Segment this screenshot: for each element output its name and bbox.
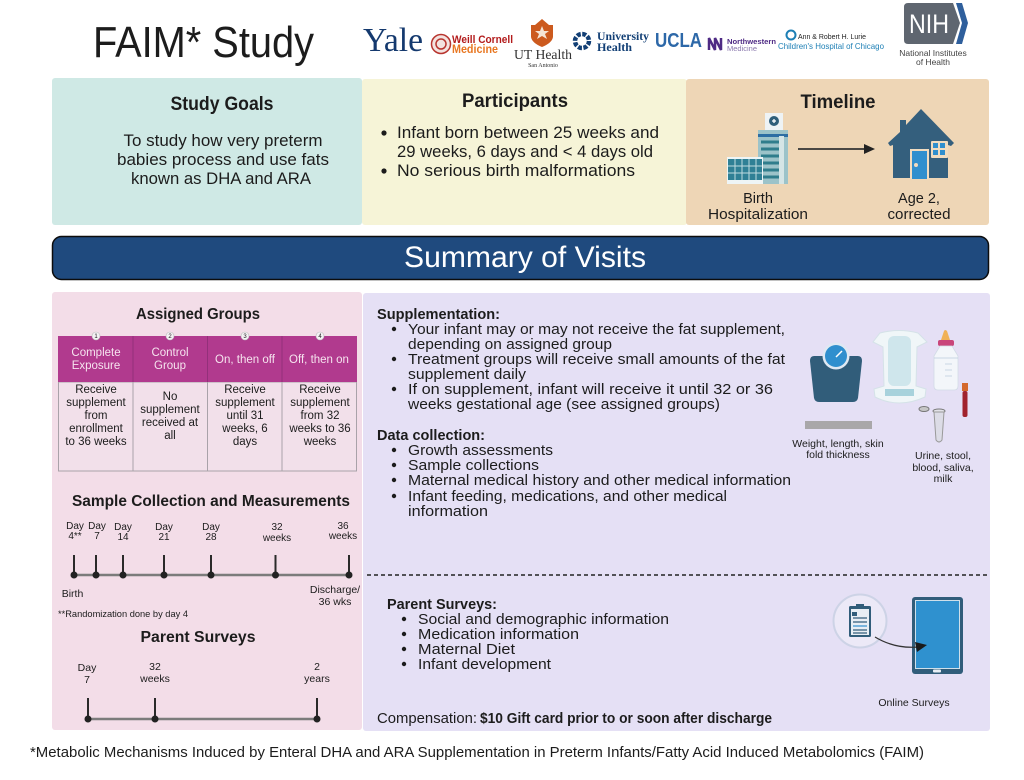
timeline: parent surveys: weeks	[139, 673, 170, 685]
label: weight length skin fold	[792, 438, 884, 461]
compensation: Compensation:	[377, 711, 477, 727]
column text: control group: No	[163, 391, 177, 403]
icon: clipboard	[834, 594, 886, 648]
icon: tablet	[912, 597, 963, 674]
supplementation text: If on supplement, infant will receive it until 32 or 36	[408, 381, 773, 398]
column headers: Off, then on	[289, 354, 349, 366]
column text: on then off: until 31	[226, 410, 264, 422]
timeline: sample collection: 36	[337, 521, 349, 532]
heading: sample collection and measurements: Sample Collection and Measurements	[72, 493, 350, 510]
table: assigned groups: 3	[243, 334, 247, 340]
table: assigned groups: 2	[168, 334, 172, 340]
icon: blood tube	[962, 383, 968, 417]
participants criteria	[381, 123, 659, 180]
logo: UCLA: UCLA	[655, 30, 702, 52]
data collection text	[377, 427, 791, 520]
column text: off then on: weeks	[303, 436, 337, 448]
label: urine stool blood saliva milk	[912, 450, 974, 485]
parent surveys text: Maternal Diet	[418, 641, 516, 658]
column headers: Control	[151, 347, 189, 359]
logo: University Health	[575, 31, 649, 54]
column text: on then off: supplement	[215, 397, 276, 409]
icon: sample vial	[919, 406, 945, 442]
timeline: sample collection: Birth	[62, 588, 83, 600]
logo: Northwestern Medicine: Northwestern	[727, 37, 776, 46]
timeline: sample collection: 14	[117, 532, 129, 543]
timeline: sample collection: 28	[205, 532, 217, 543]
panel: visit details	[363, 293, 990, 731]
column text: complete exposure: supplement	[66, 397, 127, 409]
label: urine stool blood saliva milk: Urine, stool,	[915, 450, 971, 462]
column headers	[71, 347, 349, 372]
column text: control group	[140, 391, 201, 442]
logo: NIH: National Institutes	[899, 48, 967, 58]
timeline: sample collection: weeks	[328, 531, 357, 542]
column text: on then off: days	[233, 436, 257, 448]
logo: UT Health San Antonio: UT Health	[514, 48, 572, 63]
column text: complete exposure: from	[84, 410, 108, 422]
column text: off then on	[288, 384, 351, 448]
timeline: parent surveys: years	[304, 673, 330, 685]
banner: summary of visits	[52, 236, 988, 280]
table: assigned groups: 1	[94, 334, 98, 340]
parent surveys text: Social and demographic information	[418, 611, 669, 628]
panel: timeline	[686, 79, 989, 225]
column text: complete exposure	[65, 384, 127, 448]
study goals text: To study how very preterm	[124, 131, 322, 150]
logo: Weill Cornell Medicine: Medicine	[452, 44, 498, 56]
parent surveys text: Medication information	[418, 626, 579, 643]
timeline: sample collection: 4**	[68, 531, 82, 542]
column text: off then on: supplement	[290, 397, 351, 409]
label: weight length skin fold: fold thickness	[806, 449, 870, 461]
data collection text: Maternal medical history and other medical information	[408, 472, 791, 489]
timeline: parent surveys: 32	[149, 661, 161, 673]
logo: Northwestern Medicine: Medicine	[727, 46, 757, 53]
panel: participants	[362, 79, 687, 225]
data collection text: Infant feeding, medications, and other medical	[408, 488, 727, 505]
supplementation text: supplement daily	[408, 366, 527, 383]
partner logos	[363, 3, 968, 69]
label: urine stool blood saliva milk: blood, saliva,	[912, 462, 974, 474]
timeline: sample collection: Discharge/	[310, 584, 360, 596]
label: age 2 corrected: corrected	[888, 207, 950, 223]
icon: diaper	[873, 330, 927, 403]
participants criteria: No serious birth malformations	[397, 161, 635, 180]
label: online surveys: Online Surveys	[878, 697, 950, 709]
icon: hospital	[727, 113, 788, 184]
panel: groups and schedule	[52, 292, 362, 730]
logo: UT Health San Antonio	[514, 19, 572, 69]
label: age 2 corrected	[888, 191, 950, 223]
heading: timeline: Timeline	[800, 92, 876, 113]
timeline: sample collection: Day	[155, 522, 173, 533]
compensation: $10 Gift card prior to or soon after discharge	[480, 711, 772, 727]
study goals text: babies process and use fats	[117, 150, 329, 169]
label: birth hospitalization: Birth	[743, 191, 773, 207]
logo: University Health: Health	[597, 42, 633, 54]
column headers: On, then off	[215, 354, 276, 366]
data collection text: Growth assessments	[408, 442, 553, 459]
study goals text	[117, 131, 329, 188]
label: birth hospitalization: Hospitalization	[708, 207, 808, 223]
column text: on then off: Receive	[224, 384, 266, 396]
logo: NIH	[899, 3, 968, 67]
timeline: parent surveys: 2	[314, 661, 320, 673]
logo: NIH: of Health	[916, 57, 950, 67]
title: FAIM* Study	[93, 18, 314, 67]
heading: parent surveys: Parent Surveys	[140, 629, 256, 646]
label: birth hospitalization	[708, 191, 808, 223]
parent surveys text	[387, 596, 669, 673]
column text: on then off: weeks, 6	[221, 423, 268, 435]
participants criteria: Infant born between 25 weeks and	[397, 123, 659, 142]
label: weight length skin fold: Weight, length, skin	[792, 438, 884, 450]
logo: Lurie Children's: Children's Hospital of Chicago	[778, 41, 884, 51]
column text: off then on: from 32	[300, 410, 340, 422]
arrow: birth to age 2	[798, 144, 875, 154]
column headers: Group	[154, 360, 186, 372]
column text: control group: received at	[142, 417, 199, 429]
logo: Weill Cornell Medicine: Weill Cornell	[452, 34, 513, 46]
logo: NIH: NIH	[909, 9, 949, 39]
supplementation text: depending on assigned group	[408, 336, 612, 353]
column text: control group: all	[164, 430, 176, 442]
supplementation text: Supplementation:	[377, 306, 500, 323]
logo: UT Health San Antonio: San Antonio	[528, 63, 558, 69]
arrow: clipboard to tablet	[875, 637, 927, 652]
timeline: sample collection: 32	[271, 522, 283, 533]
logo: Lurie Children's	[778, 30, 884, 51]
column headers: Exposure	[72, 360, 120, 372]
logo: University Health: University	[597, 31, 649, 43]
column headers: Complete	[71, 347, 121, 359]
timeline: sample collection: weeks	[262, 533, 291, 544]
heading: participants: Participants	[462, 91, 568, 112]
icon: home	[888, 109, 954, 179]
icon: ruler	[805, 421, 872, 429]
logo: Yale: Yale	[363, 22, 423, 59]
study goals text: known as DHA and ARA	[131, 169, 312, 188]
timeline: sample collection: 7	[94, 531, 100, 542]
data collection text: Sample collections	[408, 457, 539, 474]
panel: study goals	[52, 78, 362, 225]
supplementation text: weeks gestational age (see assigned groups)	[407, 396, 720, 413]
supplementation text: Treatment groups will receive small amounts of the fat	[408, 351, 786, 368]
timeline: sample collection: Day	[114, 522, 132, 533]
column text: off then on: Receive	[299, 384, 341, 396]
footnote: *Metabolic Mechanisms Induced by Enteral DHA and ARA Supplementation in Preterm Infants/Fatty Acid Induced Metabolomics (FAIM)	[30, 744, 924, 761]
logo: Weill Cornell Medicine	[432, 34, 513, 56]
column text: control group: supplement	[140, 404, 201, 416]
data collection text: information	[408, 503, 488, 520]
column text: complete exposure: to 36 weeks	[65, 436, 127, 448]
column text: complete exposure: enrollment	[69, 423, 124, 435]
supplementation text	[377, 306, 786, 413]
logo: Lurie Children's: Ann & Robert H. Lurie	[798, 32, 866, 41]
banner: summary of visits: Summary of Visits	[404, 241, 646, 274]
supplementation text: Your infant may or may not receive the fat supplement,	[408, 321, 785, 338]
label: urine stool blood saliva milk: milk	[934, 473, 953, 485]
timeline: parent surveys	[78, 661, 330, 722]
icon: scale	[810, 342, 862, 402]
participants criteria: 29 weeks, 6 days and < 4 days old	[397, 142, 653, 161]
timeline: parent surveys: Day	[78, 662, 97, 674]
heading: study goals: Study Goals	[170, 94, 274, 115]
timeline: sample collection: Day	[202, 522, 220, 533]
heading: assigned groups: Assigned Groups	[136, 306, 260, 323]
column text: off then on: weeks to 36	[288, 423, 351, 435]
timeline: sample collection: Day	[88, 521, 106, 532]
timeline: sample collection	[62, 521, 360, 608]
parent surveys text: Infant development	[418, 656, 552, 673]
label: age 2 corrected: Age 2,	[898, 191, 940, 207]
icon: bottle	[934, 330, 958, 390]
table: assigned groups	[58, 332, 357, 471]
timeline: parent surveys: 7	[84, 674, 90, 686]
data collection text: Data collection:	[377, 427, 485, 444]
timeline: sample collection: 36 wks	[319, 596, 351, 608]
logo: Northwestern Medicine	[709, 37, 776, 53]
column text: complete exposure: Receive	[75, 384, 117, 396]
timeline: sample collection: 21	[158, 532, 170, 543]
column text: on then off	[215, 384, 276, 448]
note: randomization: **Randomization done by day 4	[58, 609, 188, 620]
timeline: sample collection: Day	[66, 521, 84, 532]
parent surveys text: Parent Surveys:	[387, 596, 497, 613]
table: assigned groups: 4	[318, 334, 322, 340]
